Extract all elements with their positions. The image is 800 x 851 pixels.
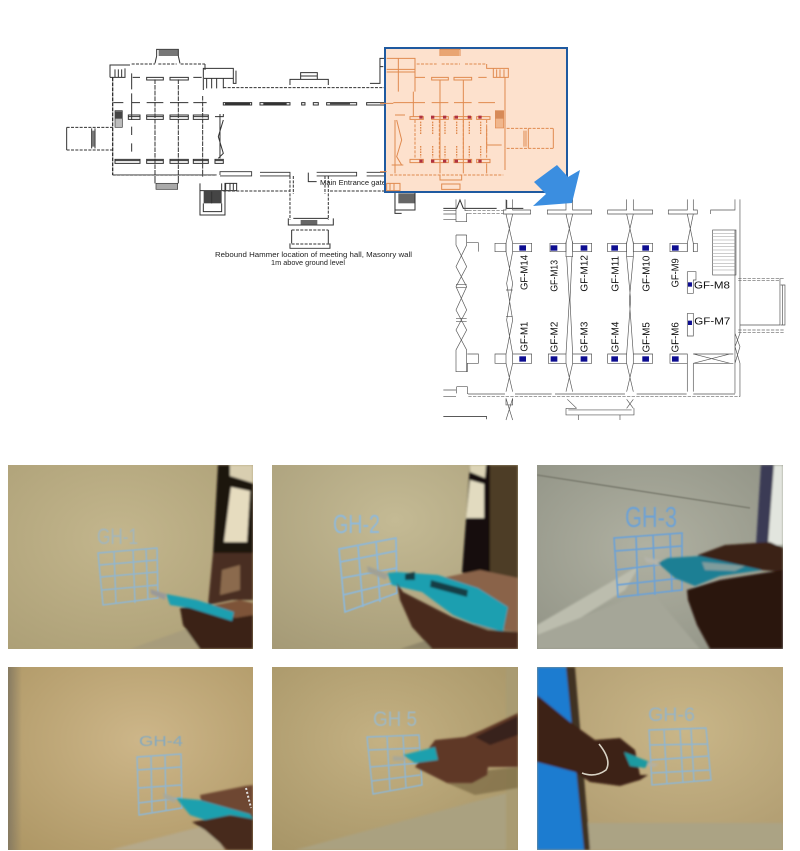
measurement point labels: GF-M1 (519, 321, 530, 352)
photo: test point GH-6: GH-6 (648, 705, 695, 726)
plan caption: 1m above ground level (271, 258, 345, 267)
measurement point labels: GF-M11 (610, 256, 621, 292)
photo: test point GH-1 (8, 465, 253, 649)
plan caption (215, 250, 412, 267)
measurement point markers (519, 245, 692, 362)
main entrance gate label: Main Entrance gate (320, 178, 386, 187)
right-hand wing stair below the highlight (395, 193, 523, 210)
arrow: highlight to enlarged plan (533, 165, 580, 206)
photo: test point GH-4 (8, 667, 253, 850)
panel: enlarged plan of rebound hammer locations (443, 199, 785, 420)
measurement point labels: GF-M3 (580, 321, 591, 352)
measurement point labels: GF-M2 (550, 321, 561, 352)
photo: test point GH-2: GH-2 (333, 509, 380, 539)
photo: test point GH-6 (537, 667, 783, 850)
floor plan line drawing (67, 49, 402, 248)
panel: overall floor plan of the meeting hall (67, 48, 567, 267)
measurement point labels (519, 255, 731, 352)
measurement point labels: GF-M7 (694, 317, 731, 328)
photo: test point GH-3: GH-3 (625, 502, 677, 534)
enlarged plan line drawing (443, 199, 785, 420)
photo: test point GH-4: GH-4 (139, 733, 183, 750)
highlighted region of the plan (380, 48, 567, 192)
measurement point labels: GF-M14 (519, 255, 530, 290)
photo: test point GH-5: GH 5 (373, 708, 417, 731)
photo: test point GH-2 (272, 465, 518, 649)
measurement point labels: GF-M6 (670, 322, 681, 352)
photo: test point GH-1: GH-1 (97, 524, 138, 549)
plan caption: Rebound Hammer location of meeting hall, Masonry wall (215, 250, 412, 259)
photo: test point GH-3 (537, 465, 783, 649)
photo: test point GH-5 (272, 667, 518, 850)
measurement point labels: GF-M13 (550, 260, 561, 292)
measurement point labels: GF-M10 (641, 255, 652, 292)
measurement point labels: GF-M9 (670, 258, 681, 287)
measurement point labels: GF-M5 (641, 322, 652, 352)
measurement point labels: GF-M4 (610, 321, 621, 352)
measurement point labels: GF-M12 (580, 255, 591, 292)
measurement point labels: GF-M8 (694, 280, 730, 291)
